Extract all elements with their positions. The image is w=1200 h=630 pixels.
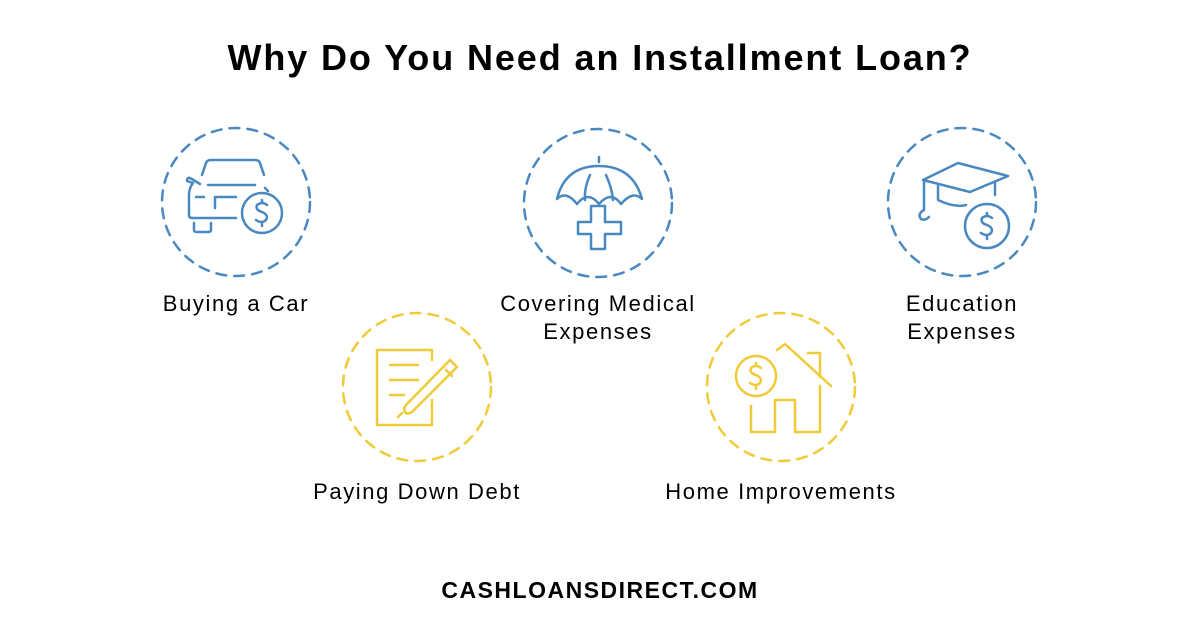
label: Covering Medical bbox=[500, 291, 696, 316]
footer: CASHLOANSDIRECT.COM bbox=[441, 577, 759, 603]
label: Home Improvements bbox=[665, 479, 897, 504]
title: Why Do You Need an Installment Loan? bbox=[227, 37, 973, 78]
item: buying a car bbox=[162, 128, 310, 316]
item: education: Expenses bbox=[907, 319, 1017, 344]
item: medical bbox=[500, 129, 696, 344]
item: medical: Expenses bbox=[543, 319, 653, 344]
icon: house dollar bbox=[707, 313, 855, 461]
item: home bbox=[665, 313, 897, 504]
item: debt bbox=[313, 313, 521, 504]
label: Education bbox=[906, 291, 1018, 316]
icon: umbrella cross bbox=[524, 129, 672, 277]
icon: car with dollar bbox=[162, 128, 310, 276]
icon: document pencil bbox=[343, 313, 491, 461]
item: education bbox=[888, 128, 1036, 344]
label: Paying Down Debt bbox=[313, 479, 521, 504]
label: Buying a Car bbox=[163, 291, 309, 316]
icon: grad cap dollar bbox=[888, 128, 1036, 276]
